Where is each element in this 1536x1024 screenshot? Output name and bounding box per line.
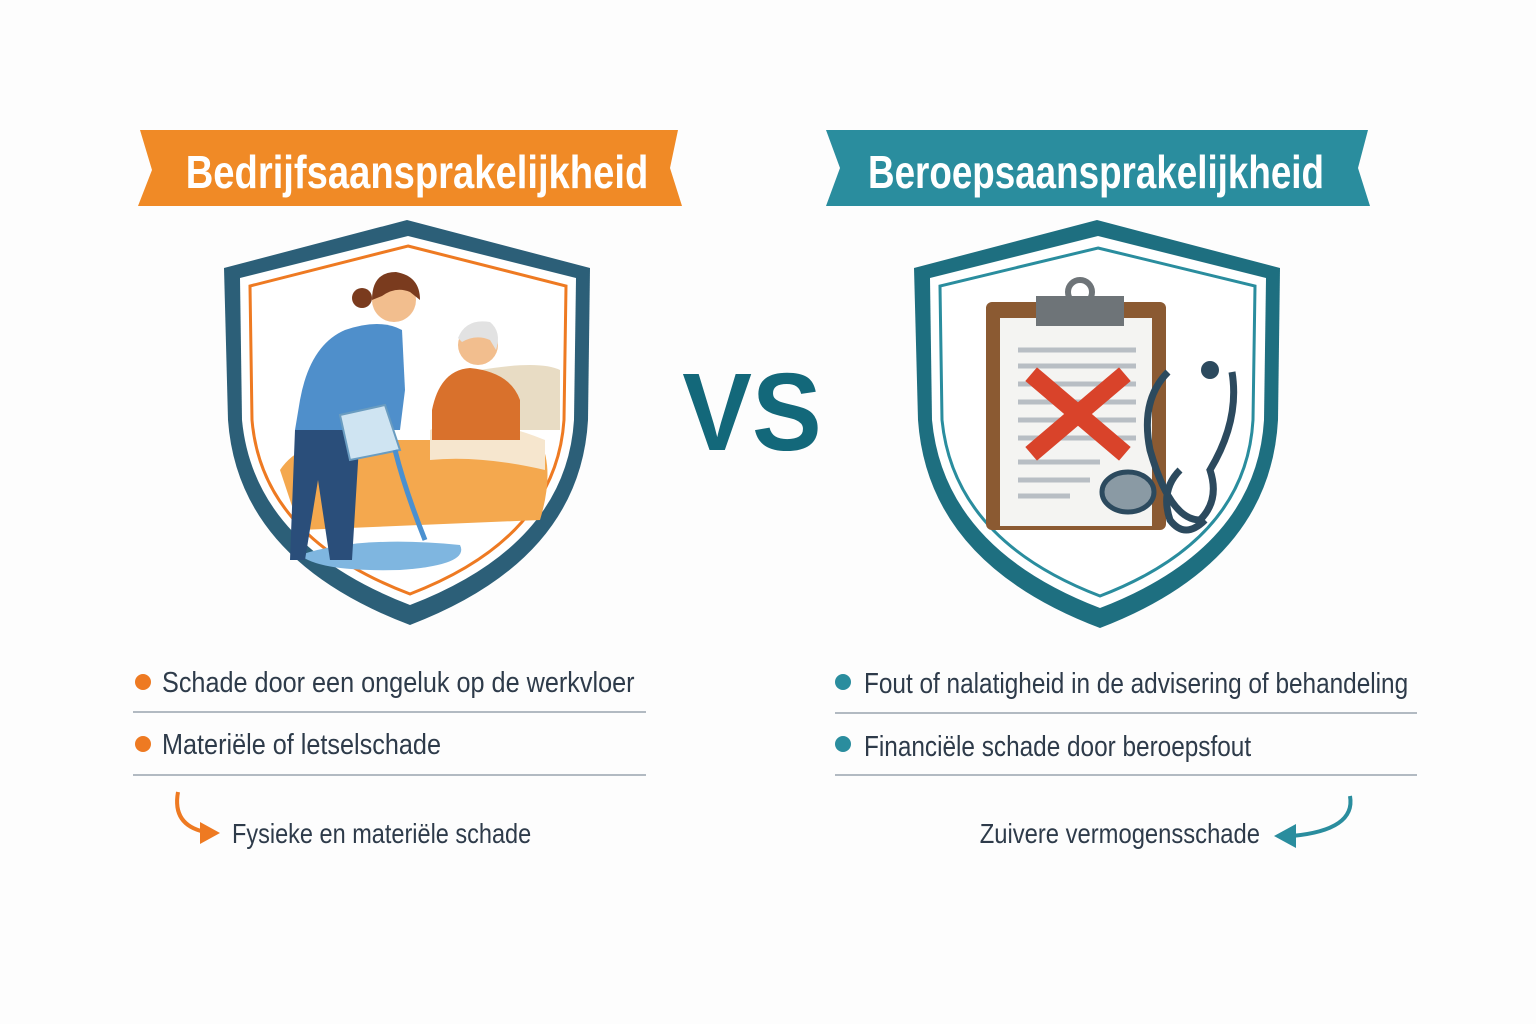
right bullets: Financiële schade door beroepsfout (864, 730, 1252, 762)
stethoscope (1147, 372, 1234, 520)
shield right: clipboard and stethoscope (914, 220, 1280, 628)
nurse (372, 278, 416, 322)
banner: Bedrijfsaansprakelijkheid: Bedrijfsaansprakelijkheid (186, 147, 648, 198)
arrow left + summary (177, 792, 531, 849)
banner: Bedrijfsaansprakelijkheid (138, 130, 682, 206)
bed scene (280, 440, 548, 530)
banner: Beroepsaansprakelijkheid: Beroepsaansprakelijkheid (868, 146, 1324, 198)
clipboard (986, 302, 1166, 530)
left bullets (133, 665, 646, 775)
left bullets: Schade door een ongeluk op de werkvloer (162, 665, 635, 698)
right bullets (835, 667, 1417, 775)
shield left: nurse spilling water (224, 220, 590, 625)
arrow right + summary: Zuivere vermogensschade (980, 817, 1260, 849)
left bullets: Materiële of letselschade (162, 727, 441, 760)
right bullets: Fout of nalatigheid in de advisering of behandeling (864, 667, 1408, 699)
VS: VS (682, 351, 822, 474)
arrow left + summary: Fysieke en materiële schade (232, 819, 531, 849)
arrow right + summary (980, 796, 1351, 849)
banner: Beroepsaansprakelijkheid (826, 130, 1370, 206)
